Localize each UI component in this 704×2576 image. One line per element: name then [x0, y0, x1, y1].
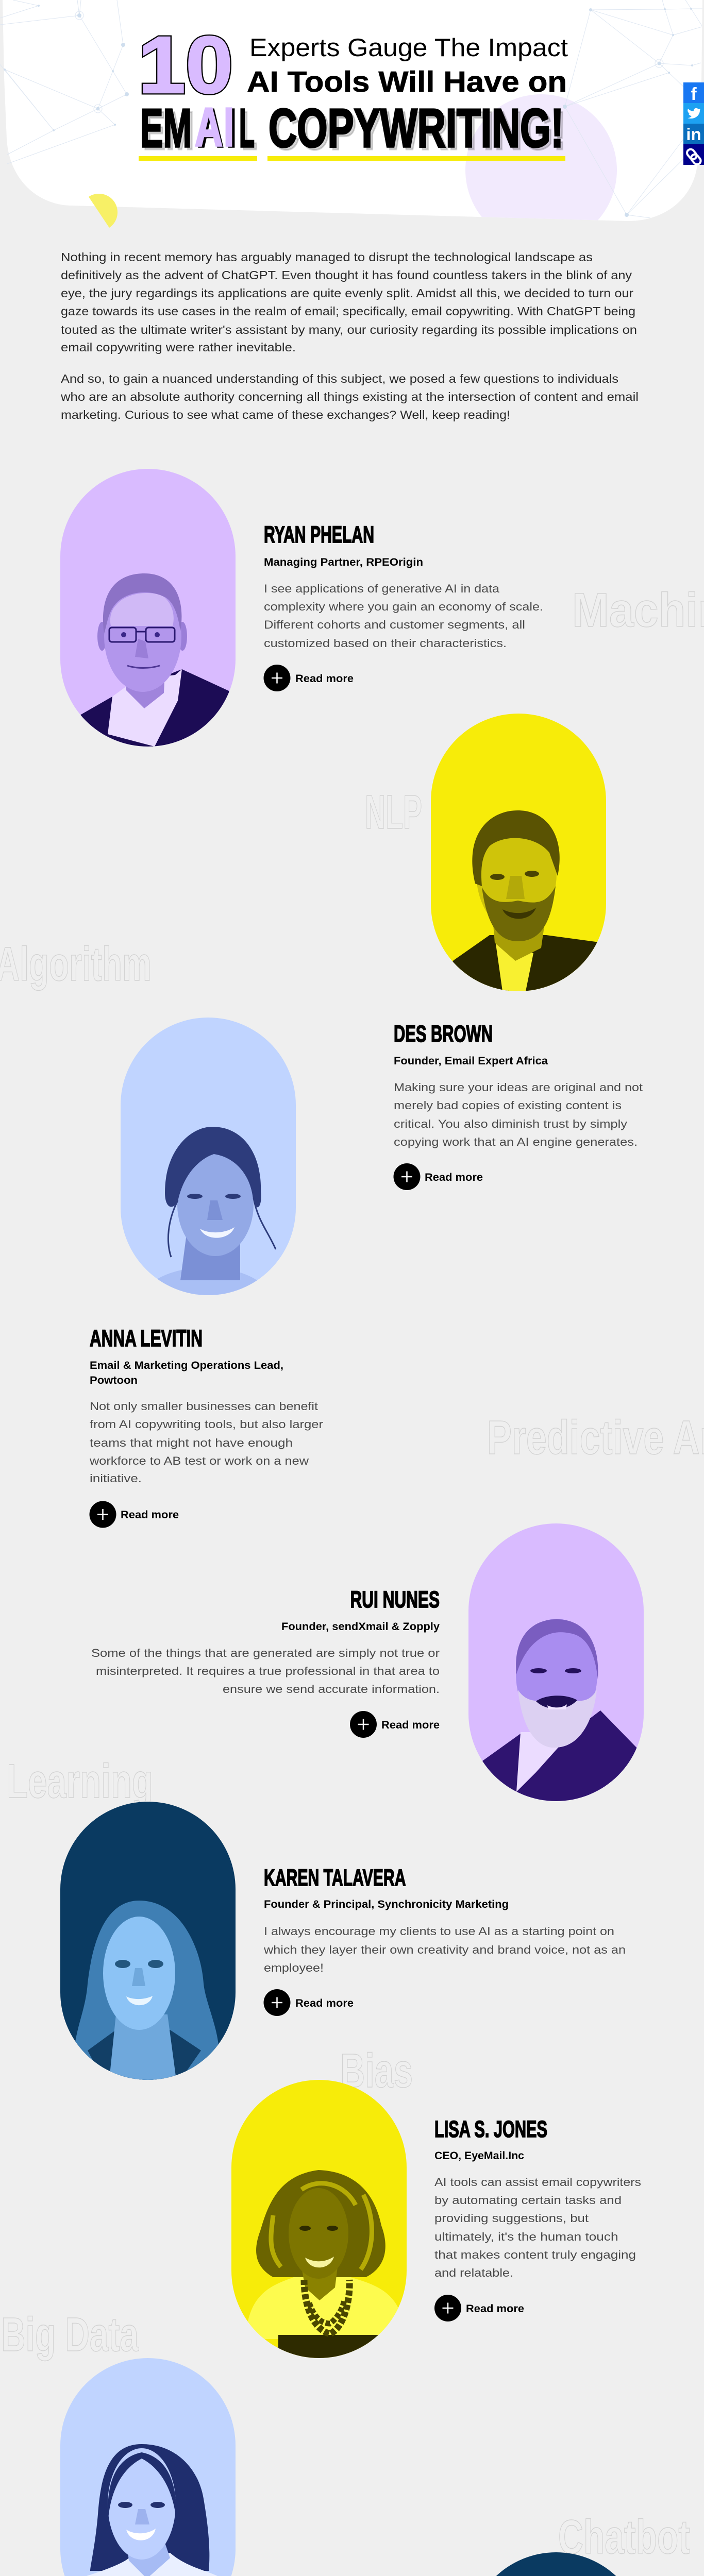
read more button	[264, 1989, 354, 2016]
yellow underline left	[139, 156, 257, 161]
header panel	[0, 0, 702, 246]
quote: providing suggestions, but	[434, 2212, 589, 2225]
name: DES BROWN	[394, 1021, 493, 1047]
name: ANNA LEVITIN	[90, 1325, 203, 1351]
quote: copying work that an AI engine generates.	[394, 1136, 638, 1148]
quote	[89, 1400, 323, 1485]
portrait: Des Brown	[431, 714, 613, 991]
title line 3 email copywriting: A	[198, 98, 224, 159]
quote: critical. You also diminish trust by simply	[394, 1117, 627, 1130]
quote: Some of the things that are generated are simply not true or	[91, 1647, 440, 1659]
title line 3 email copywriting: EM	[140, 98, 192, 159]
quote: AI tools can assist email copywriters	[434, 2176, 641, 2189]
yellow underline right	[267, 156, 565, 161]
job title: Founder & Principal, Synchronicity Marketing	[264, 1899, 509, 1910]
portrait: Rui Nunes	[468, 1523, 655, 1801]
lavender circle	[465, 94, 617, 221]
portrait: Emily McGuire	[496, 2552, 616, 2576]
icon: twitter	[683, 103, 704, 124]
portrait: Mary Aguililla	[60, 2358, 236, 2576]
read more button	[350, 1711, 440, 1738]
quote	[263, 1925, 626, 1974]
read more button	[90, 1501, 179, 1528]
name: KAREN TALAVERA	[264, 1865, 406, 1891]
portrait: Karen Talavera	[60, 1802, 236, 2080]
quote: I always encourage my clients to use AI as a starting point on	[264, 1925, 614, 1938]
quote: teams that might not have enough	[90, 1436, 293, 1449]
title line 3 email copywriting	[140, 97, 566, 161]
intro text: who are an absolute authority concerning all things existing at the intersection of content and email	[60, 390, 639, 403]
intro text: And so, to gain a nuanced understanding of this subject, we posed a few questions to individuals	[61, 372, 618, 385]
quote: by automating certain tasks and	[434, 2194, 622, 2207]
panel: Rui Nunes	[91, 1523, 655, 1801]
title line 3 email copywriting: L	[239, 98, 255, 159]
quote: and relatable.	[434, 2266, 513, 2279]
intro text: touted as the ultimate writer's assistant by many, our curiosity regarding its possible implications on	[61, 323, 637, 336]
numeral 10: 10	[138, 20, 233, 110]
panel: Mary Aguililla	[60, 2358, 236, 2576]
title line 3 email copywriting: COPYWRITING!	[269, 98, 564, 159]
intro text: marketing. Curious to see what came of these exchanges? Well, keep reading!	[61, 408, 510, 421]
watermark words: Algorithm	[0, 937, 152, 991]
name: RUI NUNES	[350, 1586, 440, 1613]
quote	[91, 1647, 440, 1696]
icon: facebook: f	[691, 84, 697, 104]
job title: Founder, sendXmail & Zopply	[281, 1621, 440, 1633]
intro text: gaze towards its use cases in the realm of email; specifically, email copywriting. With ChatGPT being	[61, 304, 635, 318]
intro text: email copywriting were rather inevitable.	[61, 341, 296, 354]
title line 1: Experts Gauge The Impact	[249, 34, 568, 62]
title line 3 email copywriting: I	[226, 98, 237, 159]
network pattern right	[563, 0, 702, 218]
read more button: Read more	[466, 2303, 524, 2315]
watermark words: Learning	[7, 1754, 153, 1808]
read more button	[394, 1163, 483, 1190]
job title: CEO, EyeMail.Inc	[434, 2150, 524, 2162]
portrait: Anna Levitin	[121, 1018, 296, 1295]
quote: misinterpreted. It requires a true professional in that area to	[96, 1665, 440, 1677]
read more button: Read more	[295, 1997, 354, 2009]
numeral 10: 10	[138, 20, 233, 110]
quote: workforce to AB test or work on a new	[89, 1454, 309, 1467]
read more button	[434, 2295, 524, 2321]
quote	[434, 2176, 641, 2279]
panel: Karen Talavera	[60, 1802, 626, 2080]
watermark words: NLP	[365, 785, 422, 839]
read more button: Read more	[295, 673, 354, 685]
job title: Founder, Email Expert Africa	[394, 1055, 548, 1067]
panel: Des Brown	[394, 714, 643, 1190]
job title: Managing Partner, RPEOrigin	[264, 556, 423, 568]
quote: which they layer their own creativity and brand voice, not as an	[263, 1943, 626, 1956]
portrait: Ryan Phelan	[60, 469, 242, 747]
watermark words: Bias	[340, 2044, 413, 2097]
job title: Powtoon	[90, 1375, 138, 1386]
quote: employee!	[264, 1961, 324, 1974]
icon: linkedin	[683, 124, 704, 144]
network pattern left	[0, 0, 129, 164]
icon: facebook	[683, 82, 704, 104]
title line 3 email copywriting: L	[242, 100, 257, 161]
job title	[90, 1360, 283, 1386]
title line 3 email copywriting: COPYWRITING!	[271, 100, 566, 161]
yellow half circle	[89, 194, 118, 228]
quote	[264, 582, 543, 650]
icon: link	[683, 144, 704, 166]
title line 3 email copywriting: EM	[143, 100, 194, 161]
read more button: Read more	[381, 1719, 440, 1731]
quote: ultimately, it's the human touch	[434, 2230, 618, 2243]
read more button: Read more	[121, 1509, 179, 1521]
intro text: Nothing in recent memory has arguably managed to disrupt the technological landscape as	[61, 250, 593, 264]
watermark words: Big Data	[1, 2308, 139, 2361]
quote: ensure we send accurate information.	[223, 1683, 440, 1696]
quote: Different cohorts and customer segments, all	[264, 618, 525, 631]
quote: Not only smaller businesses can benefit	[90, 1400, 318, 1413]
title line 2: AI Tools Will Have on	[247, 65, 567, 98]
quote: initiative.	[90, 1472, 142, 1485]
quote: complexity where you gain an economy of scale.	[264, 600, 543, 613]
intro text	[60, 250, 639, 421]
title line 3 email copywriting: A	[195, 97, 223, 158]
icon: linkedin: in	[686, 125, 701, 144]
panel: Anna Levitin	[89, 1018, 323, 1528]
watermark words	[0, 583, 704, 2564]
quote: merely bad copies of existing content is	[394, 1099, 622, 1112]
name: LISA S. JONES	[434, 2116, 547, 2142]
quote	[394, 1081, 643, 1148]
job title: Email & Marketing Operations Lead,	[90, 1360, 283, 1371]
panel: Emily McGuire	[496, 2552, 616, 2576]
quote: Making sure your ideas are original and not	[394, 1081, 643, 1094]
read more button: Read more	[425, 1172, 483, 1183]
panel: Ryan Phelan	[60, 469, 543, 747]
name: RYAN PHELAN	[264, 521, 374, 548]
header white shape	[3, 0, 702, 221]
panel: Lisa S. Jones	[231, 2080, 641, 2361]
quote: from AI copywriting tools, but also larger	[90, 1418, 323, 1431]
portrait: Lisa S. Jones	[231, 2080, 407, 2361]
quote: I see applications of generative AI in data	[264, 582, 500, 595]
title line 3 email copywriting: I	[224, 97, 234, 158]
title	[138, 20, 568, 161]
intro text: eye, the jury regardings its applications are quite evenly split. Amidst all this, we decided to turn our	[61, 286, 633, 300]
intro text: definitively as the advent of ChatGPT. Even thought it has found countless takers in the blink of any	[61, 268, 632, 282]
read more button	[264, 665, 354, 691]
quote: customized based on their characteristics.	[264, 637, 507, 650]
social share bar	[683, 82, 704, 166]
quote: that makes content truly engaging	[434, 2248, 636, 2261]
